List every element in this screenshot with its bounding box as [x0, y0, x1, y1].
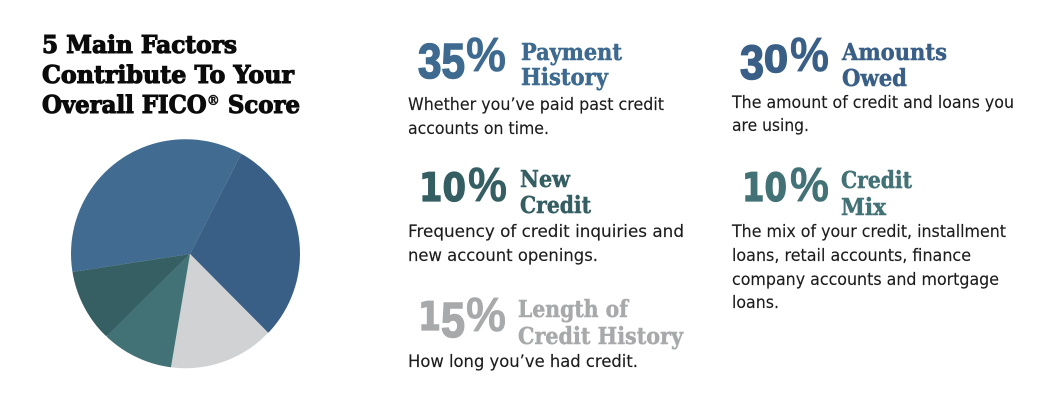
label: Credit History — [518, 323, 684, 350]
percentage 15%: % — [466, 289, 506, 342]
slice: amounts owed 30% — [190, 154, 300, 333]
slice: new credit 10% — [72, 254, 190, 336]
pie chart — [71, 139, 300, 368]
factor: new credit — [408, 159, 684, 266]
percentage 30%: 0 — [764, 38, 788, 81]
factor: credit mix — [731, 159, 1006, 313]
percentage 10%: 10 — [419, 166, 466, 211]
label: Owed — [842, 65, 907, 92]
label: Credit — [520, 192, 591, 219]
description: Frequency of credit inquiries and — [408, 222, 684, 242]
title: Contribute To Your — [42, 60, 294, 89]
percentage 35%: 35 — [418, 35, 465, 89]
title: ® — [207, 93, 220, 109]
description: new account openings. — [408, 246, 598, 266]
percentage 10%: % — [468, 159, 507, 212]
description: are using. — [732, 116, 809, 136]
description: loans. — [732, 293, 779, 313]
description: How long you’ve had credit. — [408, 352, 638, 372]
percentage 30%: 3 — [740, 37, 764, 90]
description: loans, retail accounts, finance — [732, 246, 971, 266]
percentage 10%: 10 — [742, 166, 787, 211]
description: The mix of your credit, installment — [731, 222, 1006, 242]
title: Overall FICO — [42, 90, 215, 119]
description: accounts on time. — [408, 119, 549, 139]
description: company accounts and mortgage — [732, 270, 999, 290]
percentage 15%: 1 — [418, 295, 441, 340]
description: Whether you’ve paid past credit — [408, 95, 664, 115]
description: The amount of credit and loans you — [731, 93, 1014, 113]
label: Amounts — [841, 39, 947, 66]
percentage 35%: % — [466, 29, 506, 82]
label: Payment — [521, 39, 622, 66]
title — [42, 30, 300, 119]
factor: length of credit history — [408, 289, 684, 372]
slice: credit mix 10% — [106, 254, 190, 368]
label: New — [520, 166, 571, 193]
percentage 10%: % — [790, 159, 829, 212]
title: 5 Main Factors — [42, 30, 237, 59]
title: Score — [220, 90, 300, 119]
percentage 30%: % — [790, 29, 829, 82]
slice: length of credit history 15% — [171, 254, 268, 368]
percentage 15%: 5 — [441, 294, 465, 348]
label: History — [521, 64, 609, 91]
label: Length of — [518, 296, 630, 323]
label: Credit — [841, 167, 912, 194]
slice: payment history 35% — [71, 139, 242, 272]
label: Mix — [841, 194, 886, 221]
factor: amounts owed — [731, 29, 1014, 136]
factor: payment history — [408, 29, 664, 139]
